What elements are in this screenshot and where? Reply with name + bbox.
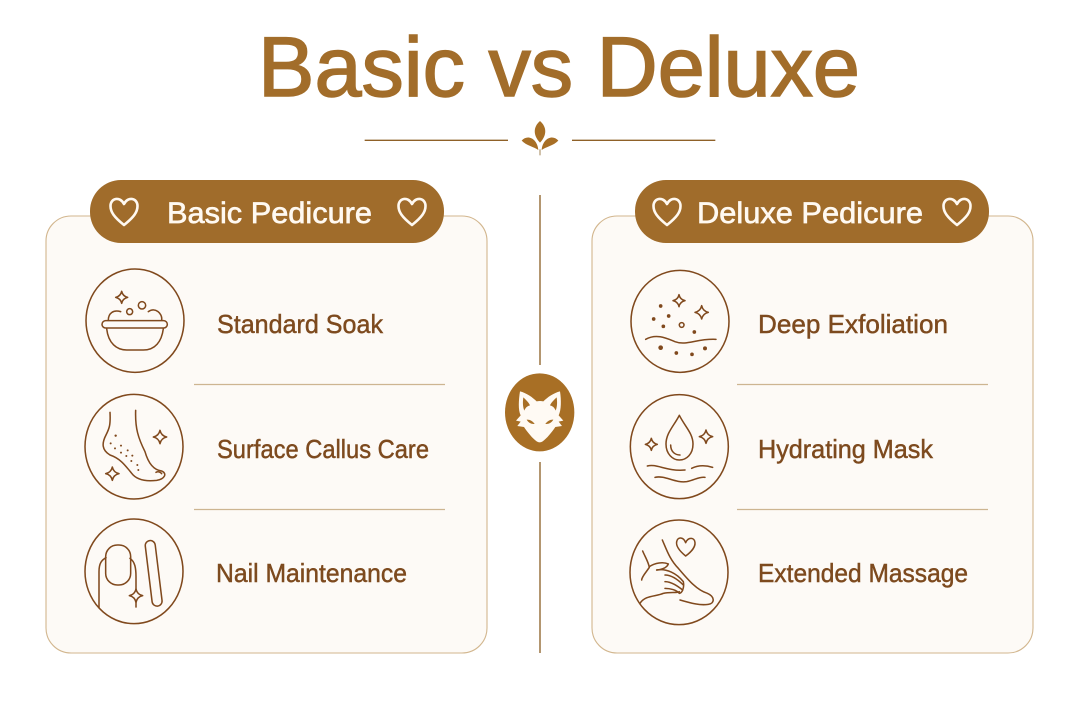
label: standard soak: Standard Soak xyxy=(217,309,384,339)
deluxe header pill: Deluxe Pedicure xyxy=(697,197,923,230)
center fox emblem xyxy=(505,373,574,451)
panel: basic pedicure xyxy=(46,180,487,653)
basic header pill: Basic Pedicure xyxy=(167,197,372,230)
label: nail maintenance: Nail Maintenance xyxy=(216,558,407,588)
divider xyxy=(194,508,445,510)
icon: foot callus xyxy=(85,394,183,499)
label: surface callus care: Surface Callus Care xyxy=(217,434,429,464)
basic panel background xyxy=(46,216,487,653)
divider xyxy=(737,508,988,510)
title: Basic vs Deluxe xyxy=(258,20,860,114)
divider xyxy=(194,384,445,386)
divider xyxy=(737,384,988,386)
label: hydrating mask: Hydrating Mask xyxy=(758,434,934,464)
basic header pill xyxy=(90,180,444,243)
deluxe panel background xyxy=(592,216,1033,653)
label: extended massage: Extended Massage xyxy=(758,558,968,588)
icon: exfoliation xyxy=(631,270,729,372)
icon: hydrating drop xyxy=(630,395,728,499)
icon: massage hands xyxy=(630,520,728,625)
icon: nail and file xyxy=(85,519,183,624)
deluxe header pill xyxy=(635,180,989,243)
center divider line xyxy=(539,195,541,653)
panel: deluxe pedicure xyxy=(592,180,1033,653)
label: deep exfoliation: Deep Exfoliation xyxy=(758,309,948,339)
icon: soak bowl xyxy=(86,269,184,372)
title ornament xyxy=(365,121,715,155)
